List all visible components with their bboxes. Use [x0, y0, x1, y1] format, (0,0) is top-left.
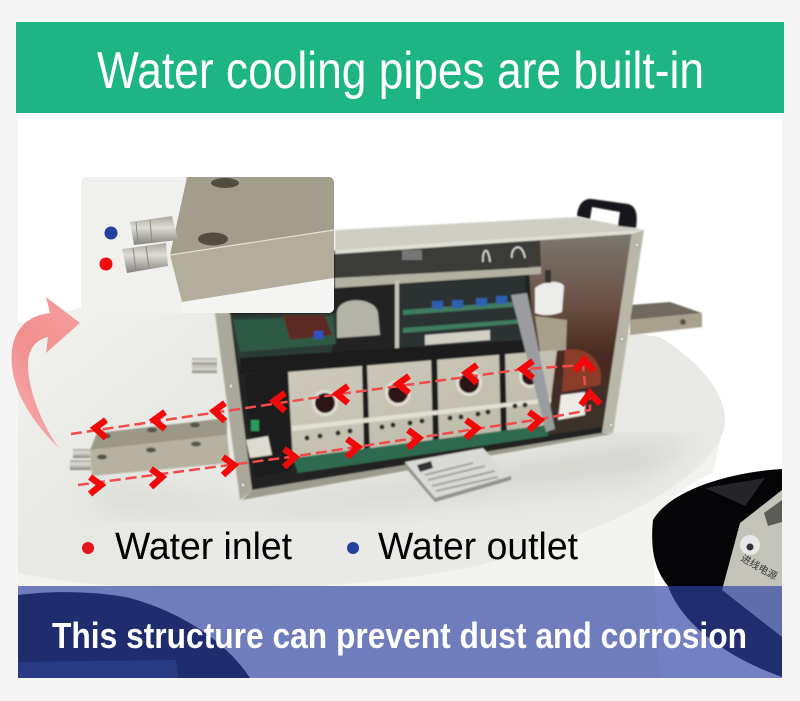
board connector blue	[314, 331, 323, 339]
block top face	[170, 177, 334, 255]
red dot	[100, 258, 112, 270]
cable gland	[740, 535, 760, 555]
rod top face	[630, 302, 702, 320]
turn chevrons pointing up	[575, 360, 600, 405]
inset lower reflection	[182, 278, 334, 313]
shelf	[335, 267, 541, 288]
case top surface	[335, 217, 644, 250]
outlet fitting	[130, 216, 178, 245]
case back wall	[527, 232, 632, 436]
legend: water inlet	[82, 526, 292, 568]
lower hole	[198, 232, 228, 246]
left dark components	[245, 370, 292, 478]
case top rim	[335, 230, 644, 254]
heatsink separators	[362, 350, 507, 453]
panel: product photo scene	[18, 113, 782, 678]
case floor rail	[242, 433, 612, 500]
outlet bullet	[347, 542, 359, 554]
pcb blue terminals	[432, 296, 507, 309]
grey ribbon	[511, 293, 555, 432]
inductor coil	[283, 315, 332, 340]
power module	[70, 199, 702, 502]
outlet chevrons pointing left	[95, 361, 533, 438]
rod front face	[630, 313, 702, 335]
block front face	[170, 230, 334, 302]
left white terminal	[246, 436, 272, 458]
pcb green layer top	[403, 301, 525, 315]
top board wires	[483, 247, 525, 262]
inlet label: Water inlet	[115, 526, 292, 568]
red wires	[562, 349, 601, 392]
title background	[16, 22, 784, 113]
dark bar	[240, 340, 523, 374]
blue dot	[104, 226, 118, 240]
outlet label: Water outlet	[378, 526, 578, 568]
gland hole	[746, 544, 754, 550]
bottom banner overlay	[18, 586, 782, 678]
upper hole	[211, 178, 239, 188]
pcb green layer lower	[403, 319, 525, 333]
right side metal bracket	[535, 316, 567, 352]
black disc bottom right	[652, 469, 782, 677]
heatsink small screw holes	[304, 402, 528, 440]
left water rod	[70, 418, 230, 476]
top board chip	[402, 250, 422, 260]
inset: fitting close-up	[81, 177, 334, 313]
rod end bolt	[680, 319, 686, 325]
inlet fitting	[122, 243, 168, 273]
inset background	[81, 177, 334, 313]
disc ribbing	[705, 478, 765, 506]
capacitor bolt	[545, 270, 551, 283]
right water rod	[630, 302, 702, 335]
case pipe stub	[192, 358, 217, 373]
device body	[722, 490, 782, 637]
frame screws	[229, 243, 639, 487]
heatsink	[288, 350, 557, 462]
legend: water outlet	[347, 526, 578, 568]
middle pcb stack	[400, 276, 525, 350]
inlet bullet	[82, 542, 94, 554]
green board left	[233, 316, 336, 352]
nameplate	[405, 448, 511, 502]
plate body	[405, 448, 511, 501]
clear acrylic box bottom left	[18, 660, 178, 678]
carry handle	[577, 199, 637, 228]
right case frame	[602, 230, 644, 433]
box shadow on table	[90, 440, 700, 515]
water flow path: supply line	[78, 397, 590, 485]
left green connector	[251, 420, 259, 431]
plate front edge	[405, 462, 511, 502]
rod holes	[106, 433, 112, 439]
photo backdrop	[18, 113, 782, 586]
heatsink holes	[312, 366, 541, 416]
table top surface	[18, 300, 725, 589]
plate text lines	[425, 463, 498, 491]
small device on disc	[722, 490, 782, 637]
white capacitor	[535, 282, 564, 315]
white block	[558, 392, 585, 420]
left case frame	[215, 313, 252, 500]
inlet chevrons pointing right	[90, 412, 540, 494]
case interior	[228, 249, 604, 491]
table side	[18, 438, 721, 586]
top board	[335, 240, 541, 278]
heatsink ridge	[292, 398, 551, 431]
rod front face	[90, 435, 230, 476]
dark disc bottom left	[18, 592, 250, 678]
title text: Water cooling pipes are built-in	[97, 42, 704, 100]
device display	[764, 500, 782, 526]
pcb white modules	[425, 330, 490, 345]
block edge highlight	[170, 230, 334, 255]
rod top face	[90, 418, 227, 450]
left interior wall	[230, 313, 340, 370]
vertical shelf post	[395, 280, 399, 352]
plate logo	[417, 461, 433, 472]
pink curved arrow	[12, 297, 80, 448]
water flow path: return line	[71, 365, 585, 434]
bottom green boards	[293, 425, 548, 473]
title bar	[16, 22, 784, 113]
inductor bracket	[337, 300, 380, 338]
device label: 进线电源	[738, 551, 780, 583]
rod pipe fittings	[73, 449, 90, 458]
